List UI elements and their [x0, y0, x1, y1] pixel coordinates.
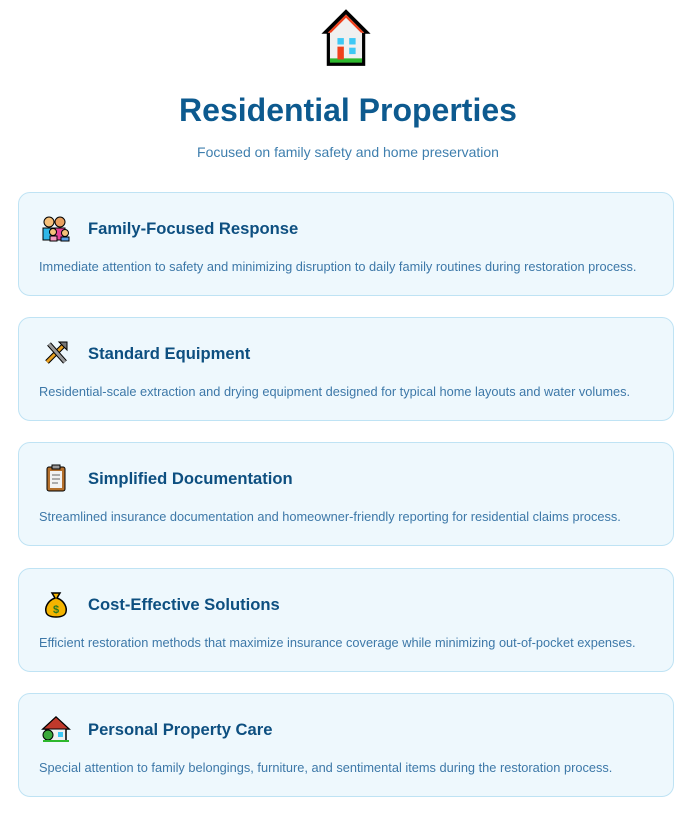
icon: house: [322, 9, 370, 66]
panel: family-focused response: [18, 192, 674, 296]
icon: clipboard: [46, 464, 66, 492]
text: Special attention to family belongings, furniture, and sentimental items during the restoration process.: [39, 760, 612, 775]
panel: simplified documentation: [18, 442, 674, 546]
panel: simplified documentation: Simplified Documentation: [88, 469, 293, 488]
subtitle: Focused on family safety and home preservation: [197, 144, 499, 160]
panel: personal property care: Personal Property Care: [88, 720, 272, 739]
icon: tools: [45, 342, 68, 364]
panel: cost-effective solutions: [18, 568, 674, 672]
text: Residential-scale extraction and drying equipment designed for typical home layouts and water volumes.: [39, 384, 630, 399]
icon: house with garden: [41, 716, 71, 742]
panel: cost-effective solutions: Cost-Effective Solutions: [88, 595, 280, 614]
panel: personal property care: [18, 693, 674, 797]
text: Immediate attention to safety and minimizing disruption to daily family routines during restoration process.: [39, 259, 636, 274]
icon: family: [42, 216, 70, 242]
text: Efficient restoration methods that maximize insurance coverage while minimizing out-of-pocket expenses.: [39, 635, 636, 650]
panel: standard equipment: [18, 317, 674, 421]
title: Residential Properties: [179, 92, 517, 128]
icon: money bag: $: [53, 604, 59, 616]
panel: family-focused response: Family-Focused Response: [88, 219, 298, 238]
text: Streamlined insurance documentation and homeowner-friendly reporting for residential claims process.: [39, 509, 621, 524]
icon: money bag: [45, 592, 67, 618]
panel: standard equipment: Standard Equipment: [88, 344, 250, 363]
